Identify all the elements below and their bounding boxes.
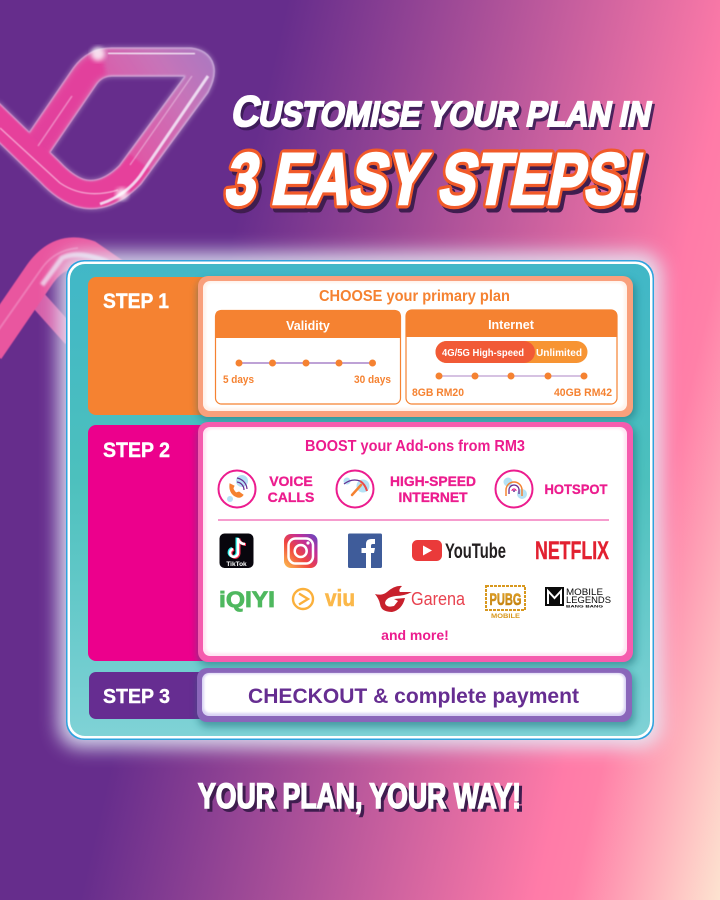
step 2 heading: BOOST your Add-ons from RM3: [305, 438, 525, 455]
logo: Mobile Legends: LEGENDS: [566, 595, 611, 606]
main panel: [58, 252, 662, 748]
logo: iQIYI: iQIYI: [219, 587, 275, 612]
logo: TikTok: TikTok: [226, 561, 247, 568]
logo: PUBG Mobile: PUBG: [490, 590, 522, 609]
icon: voice calls: [218, 470, 256, 508]
voice calls label: CALLS: [268, 489, 314, 505]
internet box: 4G/5G High-speed: [442, 348, 524, 359]
logo: Mobile Legends: BANG BANG: [566, 604, 603, 608]
step 1 tab: [88, 277, 213, 415]
logo: YouTube: YouTube: [445, 540, 506, 563]
step 3 heading: CHECKOUT & complete payment: [248, 685, 579, 708]
validity box: 30 days: [354, 374, 391, 386]
step 3 panel: [89, 668, 635, 727]
high-speed internet label: INTERNET: [398, 489, 468, 505]
logo: viu: viu: [325, 585, 355, 611]
step 2 tab: [88, 425, 213, 661]
step 1 card: [198, 276, 636, 420]
footer tagline: YOUR PLAN, YOUR WAY!: [198, 777, 521, 816]
decorative ribbon loop: [0, 47, 208, 204]
title: [219, 88, 659, 224]
step 1 heading: CHOOSE your primary plan: [319, 288, 510, 305]
title line 1: CUSTOMISE YOUR PLAN IN: [230, 91, 659, 139]
logo: YouTube: [412, 540, 506, 563]
voice calls label: VOICE: [269, 473, 313, 489]
and more label: and more!: [381, 627, 449, 643]
logo: Garena: Garena: [411, 589, 466, 609]
internet box: Unlimited: [536, 348, 582, 359]
internet box: 40GB RM42: [554, 387, 612, 399]
step 3 tab: STEP 3: [103, 685, 170, 708]
logo: viu: [293, 585, 355, 611]
title line 1: CUSTOMISE YOUR PLAN IN: [228, 88, 656, 136]
logo: Mobile Legends: MOBILE: [566, 587, 603, 598]
footer tagline: YOUR PLAN, YOUR WAY!: [201, 780, 524, 819]
logo: Mobile Legends: [545, 587, 611, 608]
step 2 card: [198, 422, 636, 666]
logo: TikTok: [220, 534, 254, 568]
validity box: Validity: [286, 319, 330, 333]
step 1 panel: [88, 276, 636, 420]
internet box: Internet: [488, 318, 535, 332]
icon: hotspot: [496, 470, 532, 508]
icon: high-speed internet: [336, 470, 374, 508]
hotspot label: HOTSPOT: [544, 481, 608, 497]
step 3 card: [197, 668, 635, 727]
logo: Garena: [375, 586, 466, 612]
logo: Netflix: NETFLIX: [535, 537, 609, 565]
high-speed internet label: HIGH-SPEED: [390, 473, 476, 489]
validity box: [216, 310, 400, 404]
step 1 tab: STEP 1: [103, 290, 169, 313]
step 2 panel: [88, 422, 636, 666]
step 3 tab: [89, 672, 214, 719]
internet box: [406, 310, 617, 404]
logo: PUBG Mobile: MOBILE: [491, 614, 520, 620]
logo: Facebook: [348, 534, 382, 568]
logo: PUBG Mobile: [486, 586, 525, 620]
step 2 tab: STEP 2: [103, 439, 170, 462]
decorative ribbon lower: [0, 248, 130, 350]
validity box: 5 days: [223, 374, 254, 386]
internet box: 8GB RM20: [412, 387, 464, 399]
logo: Instagram: [284, 534, 318, 568]
